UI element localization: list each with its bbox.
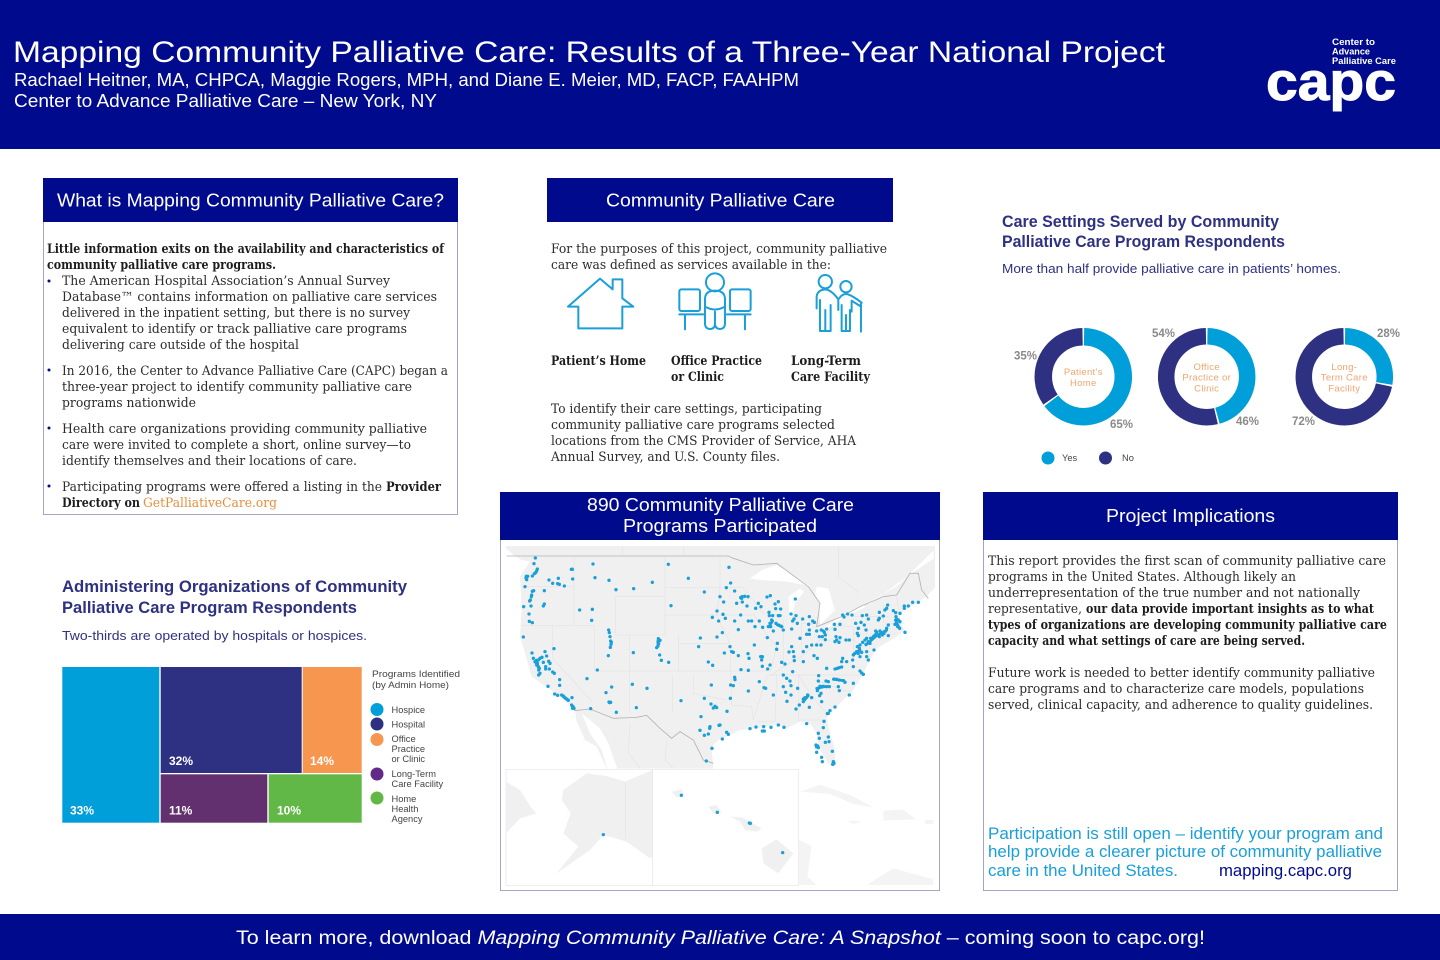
donut: patient's home: Home (1070, 378, 1097, 389)
treemap chart (62, 667, 362, 823)
map inset: caribbean (798, 785, 933, 885)
bullet list: programs nationwide (62, 395, 196, 410)
care setting labels: Patient’s Home (551, 353, 646, 368)
care setting labels: Care Facility (791, 369, 871, 384)
chart heading: Care Settings Served by Community (1002, 213, 1280, 231)
canada and mexico borders (623, 546, 860, 769)
panel: project implications (983, 492, 1398, 890)
donut: long-term care facility: 28% (1377, 328, 1400, 340)
methods text: To identify their care settings, participating (551, 401, 822, 416)
chart subtitle: More than half provide palliative care in patients’ homes. (1002, 261, 1341, 276)
treemap chart: 11% (169, 804, 193, 818)
call to action (988, 825, 1383, 880)
footer text: To learn more, download Mapping Community Palliative Care: A Snapshot – coming soon to capc.org! (236, 928, 1205, 949)
title: Mapping Community Palliative Care: Results of a Three-Year National Project (13, 36, 1166, 69)
donut: office practice or clinic: 54% (1152, 328, 1175, 340)
treemap legend: Health (392, 804, 418, 814)
treemap legend: Practice (392, 744, 425, 754)
donut: patient's home: Patient’s (1064, 367, 1103, 378)
logo: capc: Advance (1332, 46, 1370, 58)
implications paragraph: capacity and what settings of care are being served. (988, 633, 1305, 648)
program location dots: alaska and hawaii (602, 794, 784, 854)
bullet list: delivered in the inpatient setting, but there is no survey (62, 305, 411, 320)
bullet list: three-year project to identify community palliative care (62, 379, 412, 394)
program location dots: east (718, 566, 920, 766)
donut: patient's home: 65% (1110, 419, 1133, 431)
donut: long-term care facility: 72% (1292, 416, 1315, 428)
treemap legend: Office (392, 734, 416, 744)
methods text: locations from the CMS Provider of Service, AHA (551, 433, 857, 448)
treemap legend: Home (392, 794, 416, 804)
implications paragraph: underrepresentation of the true number and not nationally (988, 585, 1361, 600)
affiliation: Center to Advance Palliative Care – New York, NY (14, 91, 437, 111)
treemap chart: 32% (169, 754, 193, 768)
chart heading: Administering Organizations of Community (62, 578, 408, 596)
chart heading (1002, 213, 1285, 251)
care setting labels (551, 353, 871, 384)
map heading: Programs Participated (623, 516, 817, 536)
map inset: hawaii (653, 769, 798, 885)
call to action: Participation is still open – identify your program and (988, 825, 1383, 843)
future work paragraph (988, 665, 1375, 712)
chart heading: Palliative Care Program Respondents (62, 599, 357, 617)
call to action: care in the United States. (988, 862, 1178, 880)
logo: capc: capc (1266, 52, 1396, 112)
donut legend: Yes (1062, 453, 1078, 463)
bullet list (48, 273, 448, 510)
panel: administering organizations (62, 578, 460, 824)
treemap legend: Long-Term (392, 769, 436, 779)
map heading: 890 Community Palliative Care (587, 495, 854, 515)
donut: office practice or clinic (1152, 328, 1259, 428)
panel heading: Project Implications (1106, 506, 1275, 526)
donut legend: No (1122, 453, 1134, 463)
bullet list: GetPalliativeCare.org (143, 495, 277, 510)
intro text: community palliative care programs. (47, 257, 276, 272)
donut: long-term care facility: Long- (1331, 362, 1357, 373)
donut: long-term care facility: Facility (1328, 384, 1360, 394)
call to action: help provide a clearer picture of community palliative (988, 843, 1382, 861)
panel heading: Community Palliative Care (606, 190, 835, 210)
implications paragraph: types of organizations are developing community palliative care (988, 617, 1387, 632)
panel heading: What is Mapping Community Palliative Care? (57, 190, 444, 210)
bullet list: equivalent to identify or track palliative care programs (62, 321, 407, 336)
bullet list: care were invited to complete a short, online survey—to (62, 437, 411, 452)
chart subtitle: Two-thirds are operated by hospitals or hospices. (62, 628, 367, 643)
care setting labels: or Clinic (671, 369, 724, 384)
implications paragraph: programs in the United States. Although likely an (988, 569, 1296, 584)
bullet list: Provider (386, 479, 441, 494)
bullet list: Participating programs were offered a listing in the (62, 479, 382, 494)
logo: capc: Palliative Care (1332, 56, 1396, 67)
donut: patient's home: 35% (1014, 350, 1037, 362)
care setting labels: Long-Term (791, 353, 862, 368)
donut legend (1042, 452, 1134, 464)
intro text (47, 241, 445, 272)
bullet list: delivering care outside of the hospital (62, 337, 299, 352)
treemap legend: or Clinic (392, 754, 425, 764)
treemap chart: 14% (310, 754, 334, 768)
implications paragraph: This report provides the first scan of community palliative care (988, 553, 1386, 568)
future work paragraph: served, clinical capacity, and adherence to quality guidelines. (988, 697, 1373, 712)
future work paragraph: care programs and to characterize care models, populations (988, 681, 1364, 696)
methods text: Annual Survey, and U.S. County files. (550, 449, 780, 464)
icon: house (568, 279, 633, 328)
treemap legend: Programs Identified (372, 669, 460, 679)
icon: person in office chairs (679, 273, 751, 329)
panel: community palliative care (547, 178, 893, 464)
definition text: care was defined as services available in the: (551, 257, 831, 272)
future work paragraph: Future work is needed to better identify community palliative (988, 665, 1375, 680)
bullet list: identify themselves and their locations of care. (62, 453, 357, 468)
definition text: For the purposes of this project, community palliative (551, 241, 887, 256)
panel: care settings donuts (1002, 213, 1400, 464)
chart heading (62, 578, 408, 617)
treemap legend: Agency (392, 814, 423, 824)
program location dots: west (522, 556, 721, 763)
state borders (522, 557, 905, 722)
treemap legend: (by Admin Home) (372, 680, 449, 690)
implications paragraph: representative, (988, 601, 1082, 616)
care setting labels: Office Practice (671, 353, 762, 368)
header banner (0, 0, 1440, 149)
authors: Rachael Heitner, MA, CHPCA, Maggie Rogers, MPH, and Diane E. Meier, MD, FACP, FAAHPM (14, 70, 799, 90)
treemap legend: Hospice (392, 705, 425, 715)
panel: map of participating programs (500, 492, 940, 890)
treemap chart: 33% (70, 804, 94, 818)
chart heading: Palliative Care Program Respondents (1002, 233, 1285, 251)
implications paragraph (988, 553, 1387, 648)
call to action: mapping.capc.org (1219, 862, 1352, 880)
bullet list: The American Hospital Association’s Annual Survey (62, 273, 391, 288)
bullet list: Health care organizations providing community palliative (62, 421, 427, 436)
treemap legend: Hospital (392, 720, 425, 730)
treemap legend (370, 669, 460, 824)
donut: office practice or clinic: Office (1193, 362, 1220, 373)
map heading (587, 495, 854, 536)
map of the United States (506, 546, 935, 769)
bullet list: Database™ contains information on palliative care services (62, 289, 437, 304)
map inset: alaska (506, 769, 653, 885)
donut: office practice or clinic: Clinic (1194, 384, 1219, 394)
implications paragraph: our data provide important insights as to what (1086, 601, 1374, 616)
bullet list: In 2016, the Center to Advance Palliative Care (CAPC) began a (62, 363, 448, 378)
intro text: Little information exits on the availability and characteristics of (47, 241, 445, 256)
icon: elderly people with cane (817, 275, 862, 332)
footer banner (0, 914, 1440, 960)
donut: office practice or clinic: Practice or (1182, 372, 1231, 384)
methods text (550, 401, 857, 464)
donut: long-term care facility: Term Care (1321, 372, 1368, 384)
panel: what is mapping community palliative care (43, 178, 458, 514)
logo: capc: Center to (1332, 37, 1375, 48)
donut: long-term care facility (1292, 328, 1400, 428)
treemap legend: Care Facility (392, 779, 444, 789)
bullet list: Directory on (62, 495, 140, 510)
methods text: community palliative care programs selected (551, 417, 835, 432)
donut: office practice or clinic: 46% (1236, 416, 1259, 428)
treemap chart: 10% (277, 804, 301, 818)
donut: patient's home (1014, 337, 1133, 431)
definition text (551, 241, 887, 272)
